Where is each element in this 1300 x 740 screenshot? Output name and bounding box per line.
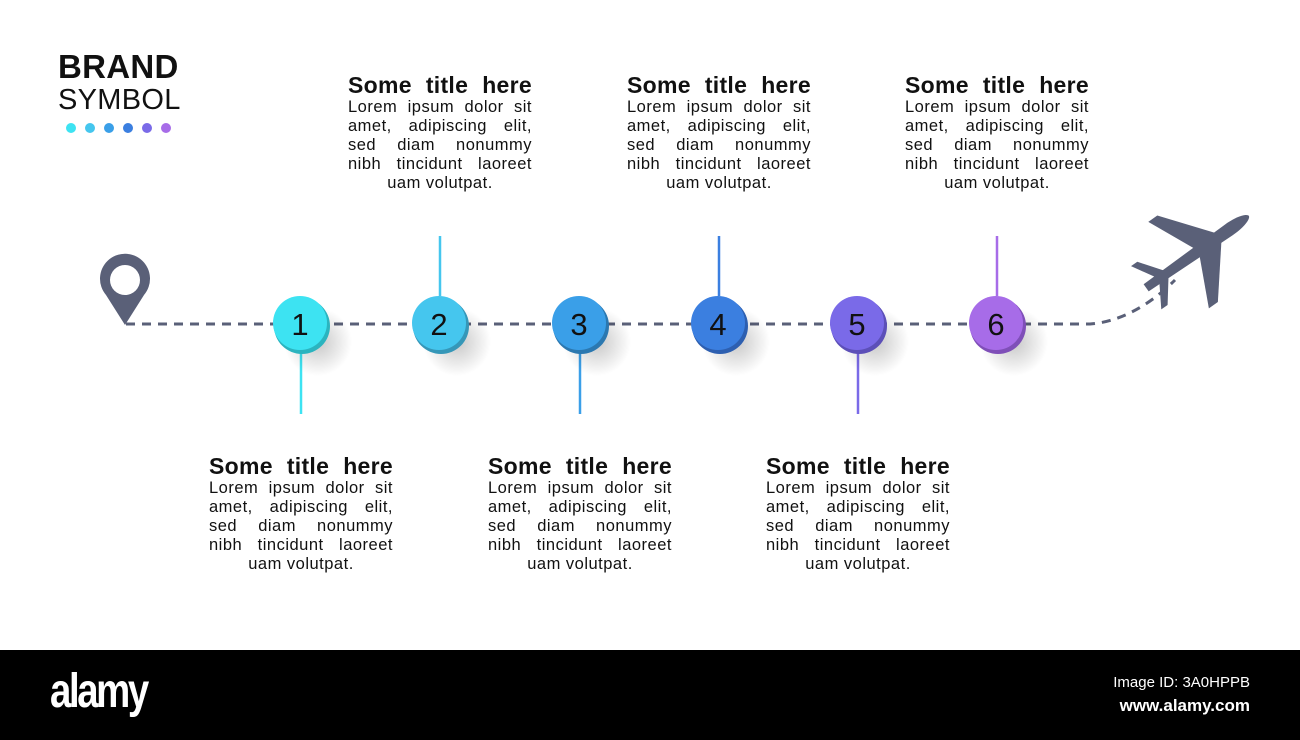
step 5 marker — [830, 296, 909, 376]
text block 4 — [627, 72, 811, 192]
text block 5 — [766, 453, 950, 573]
step 1 marker — [273, 296, 352, 376]
text block 3: Lorem ipsum dolor sit — [488, 479, 672, 497]
text block 2: nibh tincidunt laoreet — [348, 155, 532, 173]
text block 1: Some title here — [209, 453, 393, 479]
text block 5: Some title here — [766, 453, 950, 479]
text block 4: nibh tincidunt laoreet — [627, 155, 811, 173]
text block 5: sed diam nonummy — [766, 517, 950, 535]
stems — [301, 236, 997, 414]
step 1 marker: 1 — [291, 307, 309, 342]
dashed path — [126, 280, 1175, 324]
text block 3 — [488, 453, 672, 573]
text block 6: Some title here — [905, 72, 1089, 98]
text block 2: uam volutpat. — [387, 174, 493, 192]
text block 5: Lorem ipsum dolor sit — [766, 479, 950, 497]
footer image id: Image ID: 3A0HPPB — [1113, 674, 1250, 691]
text block 1: nibh tincidunt laoreet — [209, 536, 393, 554]
text block 4: Some title here — [627, 72, 811, 98]
text block 2: Some title here — [348, 72, 532, 98]
brand subtitle: SYMBOL — [58, 84, 181, 116]
step 6 marker: 6 — [987, 307, 1005, 342]
text block 5: nibh tincidunt laoreet — [766, 536, 950, 554]
brand logo — [58, 48, 181, 133]
text block 4: amet, adipiscing elit, — [627, 117, 811, 135]
text block 1: amet, adipiscing elit, — [209, 498, 393, 516]
text block 2: sed diam nonummy — [348, 136, 532, 154]
text block 5: amet, adipiscing elit, — [766, 498, 950, 516]
text block 3: Some title here — [488, 453, 672, 479]
icon: location pin — [100, 254, 150, 325]
text block 6: uam volutpat. — [944, 174, 1050, 192]
text block 1: uam volutpat. — [248, 555, 354, 573]
step 5 marker: 5 — [848, 307, 866, 342]
text block 3: amet, adipiscing elit, — [488, 498, 672, 516]
step 2 marker: 2 — [430, 307, 448, 342]
text block 4: Lorem ipsum dolor sit — [627, 98, 811, 116]
text block 6 — [905, 72, 1089, 192]
text block 2: amet, adipiscing elit, — [348, 117, 532, 135]
footer url: www.alamy.com — [1120, 696, 1250, 715]
footer logo: alamy — [50, 665, 147, 718]
text block 6: amet, adipiscing elit, — [905, 117, 1089, 135]
text block 3: nibh tincidunt laoreet — [488, 536, 672, 554]
brand title: BRAND — [58, 48, 179, 85]
text block 1 — [209, 453, 393, 573]
step 6 marker — [969, 296, 1048, 376]
step 3 marker: 3 — [570, 307, 588, 342]
text block 3: sed diam nonummy — [488, 517, 672, 535]
step 4 marker: 4 — [709, 307, 727, 342]
footer bar — [0, 650, 1300, 740]
text block 5: uam volutpat. — [805, 555, 911, 573]
text block 4: sed diam nonummy — [627, 136, 811, 154]
text block 1: Lorem ipsum dolor sit — [209, 479, 393, 497]
text block 3: uam volutpat. — [527, 555, 633, 573]
icon: airplane — [1116, 173, 1279, 331]
step 2 marker — [412, 296, 491, 376]
step 3 marker — [552, 296, 631, 376]
brand dots — [66, 123, 171, 133]
text block 6: Lorem ipsum dolor sit — [905, 98, 1089, 116]
text block 6: nibh tincidunt laoreet — [905, 155, 1089, 173]
text block 2: Lorem ipsum dolor sit — [348, 98, 532, 116]
text block 4: uam volutpat. — [666, 174, 772, 192]
text block 2 — [348, 72, 532, 192]
step 4 marker — [691, 296, 770, 376]
text block 6: sed diam nonummy — [905, 136, 1089, 154]
text block 1: sed diam nonummy — [209, 517, 393, 535]
